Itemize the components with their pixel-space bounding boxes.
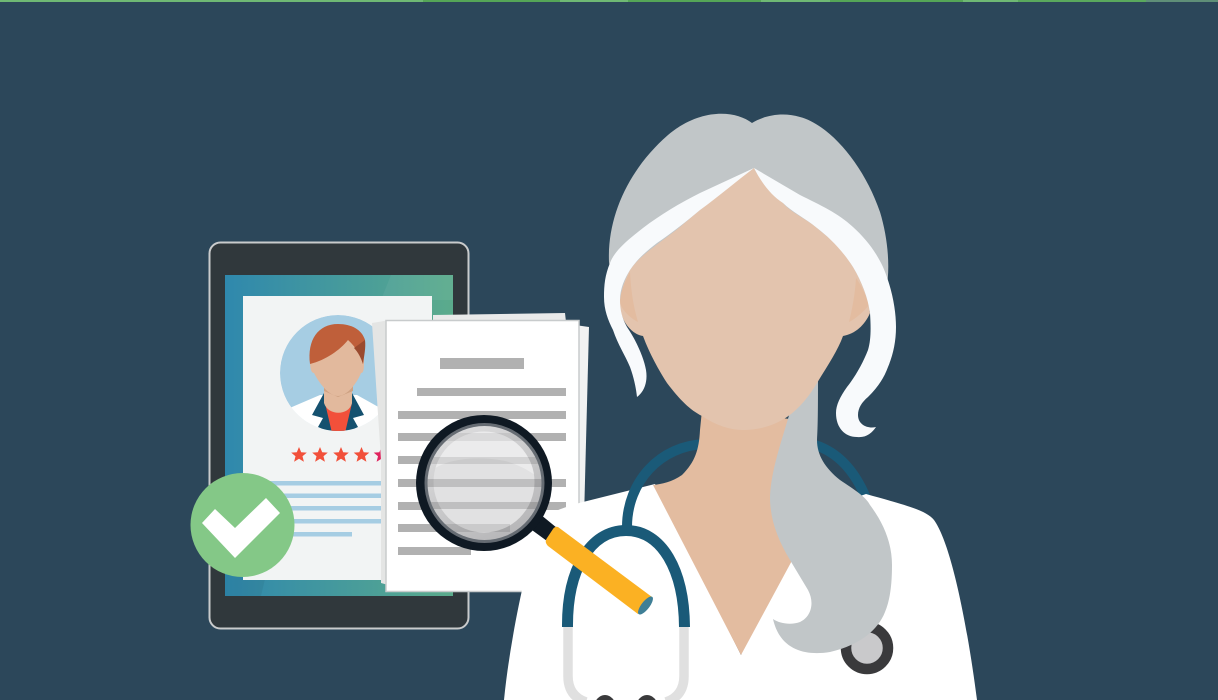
approval check badge [190,473,294,577]
lens [428,426,542,540]
stethoscope neck tube [627,444,706,527]
document text lines [398,358,566,555]
white hair strands [604,168,896,437]
white coat [504,484,977,700]
rating stars [291,447,389,462]
face [620,168,870,430]
profile text lines [268,481,386,536]
ear shading [620,272,869,322]
profile card [243,296,432,580]
tablet [210,242,468,628]
tablet screen [225,275,453,596]
main document [386,320,579,592]
avatar [280,315,378,431]
chest piece [846,627,888,669]
top green strip [0,0,1218,2]
neck [653,410,800,655]
handle [525,510,557,541]
hair tail [770,375,892,653]
magnifying glass [416,415,655,617]
document stack [372,313,589,596]
stethoscope lower tubes [567,530,684,700]
stethoscope back tube right [815,445,866,498]
hair back [609,114,888,310]
